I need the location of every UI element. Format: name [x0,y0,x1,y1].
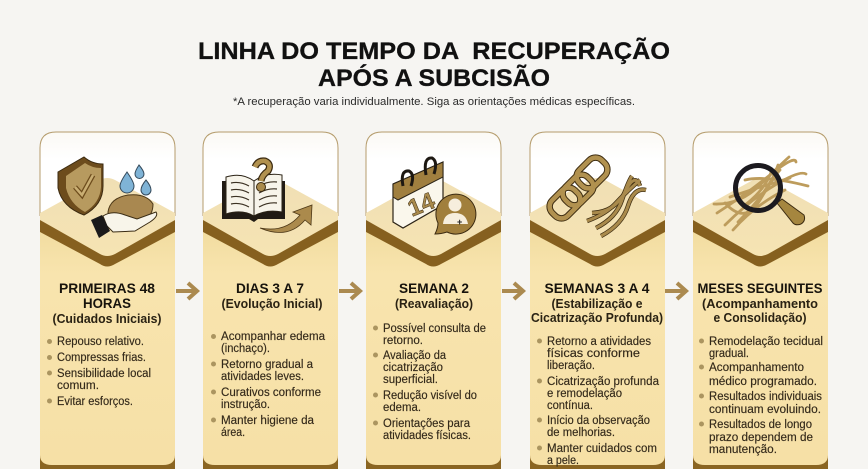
subtitle note: *A recuperação varia individualmente. Siga as orientações médicas específicas. [233,96,635,108]
bullet list: edema. [383,402,421,414]
card background 1 [40,132,175,469]
bullet list [47,336,151,408]
card background 5 [693,132,828,469]
heading: (Acompanhamento [702,297,818,311]
bullet list: Manter higiene da [221,415,315,427]
card background 4 [530,132,665,469]
bullet list: Início da observação [547,415,650,427]
bullet list: de melhorias. [547,427,615,439]
card background 3 [366,132,501,469]
bullet list: cicatrização [383,362,443,374]
panel: semana 2 [366,132,501,469]
heading: (Cuidados Iniciais) [52,312,162,326]
bullet list: atividades físicas. [383,430,471,442]
bullet list: Remodelação tecidual [709,336,823,348]
bullet list: Sensibilidade local [57,368,151,380]
bullet list: Possível consulta de [383,323,486,335]
panel: meses seguintes [693,132,828,469]
heading: (Evolução Inicial) [222,297,322,311]
heading [531,280,663,325]
bullet list: instrução. [221,399,270,411]
icon: shield, drops and hand [58,157,157,238]
card background 2 [203,132,338,469]
bullet list: área. [221,427,245,439]
icon: book, question mark and arrow [222,161,312,232]
title: APÓS A SUBCISÃO [318,64,550,92]
heading: (Estabilização e [552,297,643,311]
bullet list [373,323,486,442]
bullet list: Evitar esforços. [57,396,133,408]
bullet list: prazo dependem de [709,432,813,444]
bullet list: a pele. [547,455,579,467]
bullet list: atividades leves. [221,371,304,383]
heading: Cicatrização Profunda) [531,311,663,325]
bullet list: Retorno gradual a [221,359,314,371]
panel: semanas 3 a 4 [530,132,665,469]
bullet list: manutenção. [709,444,777,456]
bullet list: Manter cuidados com [547,443,657,455]
bullet list: Retorno a atividades [547,336,651,348]
bullet list: gradual. [709,348,749,360]
bullet list [699,336,823,456]
heading: SEMANAS 3 A 4 [544,280,650,296]
heading: MESES SEGUINTES [698,280,822,296]
bullet list: continuam evoluindo. [709,404,821,416]
heading [222,280,322,311]
heading [52,280,162,326]
bullet list: Avaliação da [383,350,447,362]
bullet list: médico programado. [709,376,817,388]
icon: magnifier over fibers [714,157,808,230]
heading: HORAS [83,295,131,311]
panel: primeiras 48 horas [40,132,175,469]
bullet list: Resultados individuais [709,391,822,403]
bullet list: comum. [57,380,99,392]
bullet list: Orientações para [383,418,471,430]
heading: PRIMEIRAS 48 [59,280,155,296]
panel: dias 3 a 7 [203,132,338,469]
title [198,37,670,92]
heading: DIAS 3 A 7 [236,280,304,296]
bullet list: contínua. [547,400,593,412]
bullet list: (inchaço). [221,343,270,355]
arrow 2 [339,283,360,299]
bullet list: Curativos conforme [221,387,321,399]
heading: e Consolidação) [714,311,806,325]
icon: chain links and rope [546,154,646,236]
bullet list: liberação. [547,360,595,372]
bullet list: Redução visível do [383,390,477,402]
bullet list: e remodelação [547,388,622,400]
bullet list [537,336,660,467]
bullet list: Resultados de longo [709,419,812,431]
bullet list: retorno. [383,335,423,347]
bullet list: físicas conforme [547,348,640,360]
title: LINHA DO TEMPO DA RECUPERAÇÃO [198,37,670,65]
arrow 4 [665,283,686,299]
bullet list: Acompanhar edema [221,331,326,343]
heading: (Reavaliação) [395,297,473,311]
bullet list: superficial. [383,374,438,386]
bullet list: Compressas frias. [57,352,146,364]
heading [698,280,822,325]
bullet list: Cicatrização profunda [547,376,660,388]
bullet list: Acompanhamento [709,362,804,374]
bullet list [211,331,326,439]
heading [395,280,473,311]
bullet list: Repouso relativo. [57,336,144,348]
icon: calendar and doctor bubble: 14 [404,187,439,222]
arrow 1 [176,283,197,299]
icon: calendar and doctor bubble: + [457,217,462,227]
arrow 3 [502,283,523,299]
icon: calendar and doctor bubble [393,158,476,234]
heading: SEMANA 2 [399,280,469,296]
